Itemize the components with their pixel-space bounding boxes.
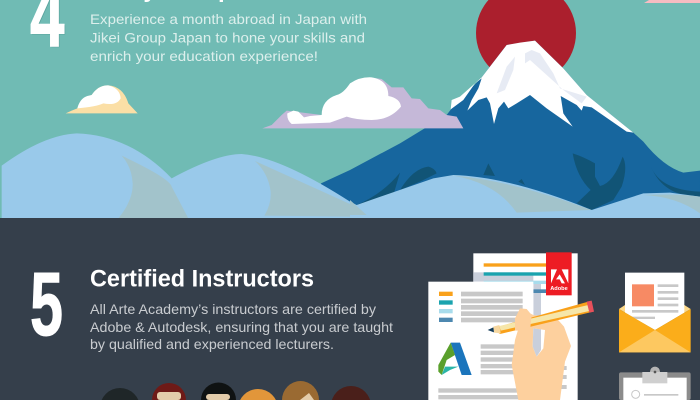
icon: instructor faces xyxy=(100,381,371,400)
icon: purple cloud xyxy=(262,77,463,128)
number 5: 5 xyxy=(30,255,63,355)
panel: certified instructors xyxy=(0,218,700,400)
text block: instructors description: by qualified and experienced lecturers. xyxy=(90,336,334,352)
text block: instructors description: Adobe & Autodesk, ensuring that you are taught xyxy=(90,319,393,335)
icon: red sun xyxy=(476,0,576,83)
text block: Japan description: enrich your education experience! xyxy=(90,48,318,64)
illustration: blue waves xyxy=(2,133,700,218)
text block: Japan description: Jikei Group Japan to hone your skills and xyxy=(90,30,365,46)
icon: hand xyxy=(512,308,571,400)
illustration: mount Fuji xyxy=(321,41,700,218)
gap between fingers xyxy=(533,328,545,357)
icon: envelope xyxy=(619,273,691,352)
text block: instructors description: All Arte Academy’s instructors are certified by xyxy=(90,301,376,317)
front document xyxy=(428,282,533,400)
icon: Adobe badge: Adobe xyxy=(550,286,568,292)
icon: Autodesk logo xyxy=(438,343,472,375)
icon: pink cloud fragment xyxy=(644,0,700,3)
icon: Adobe badge xyxy=(546,252,572,295)
text block: instructors description xyxy=(90,301,393,352)
illustration: certificates and hand xyxy=(428,252,594,400)
panel: study in Japan xyxy=(0,0,700,219)
icon: clipboard xyxy=(619,367,691,400)
icon: pencil xyxy=(488,301,594,334)
back document xyxy=(473,253,578,400)
icon: cream cloud xyxy=(66,85,138,113)
heading: Certified Instructors: Certified Instructors xyxy=(90,266,314,292)
text block: Japan description: Experience a month abroad in Japan with xyxy=(90,11,367,27)
text block: Japan description xyxy=(90,11,367,64)
icon: finger over pencil xyxy=(515,308,532,331)
